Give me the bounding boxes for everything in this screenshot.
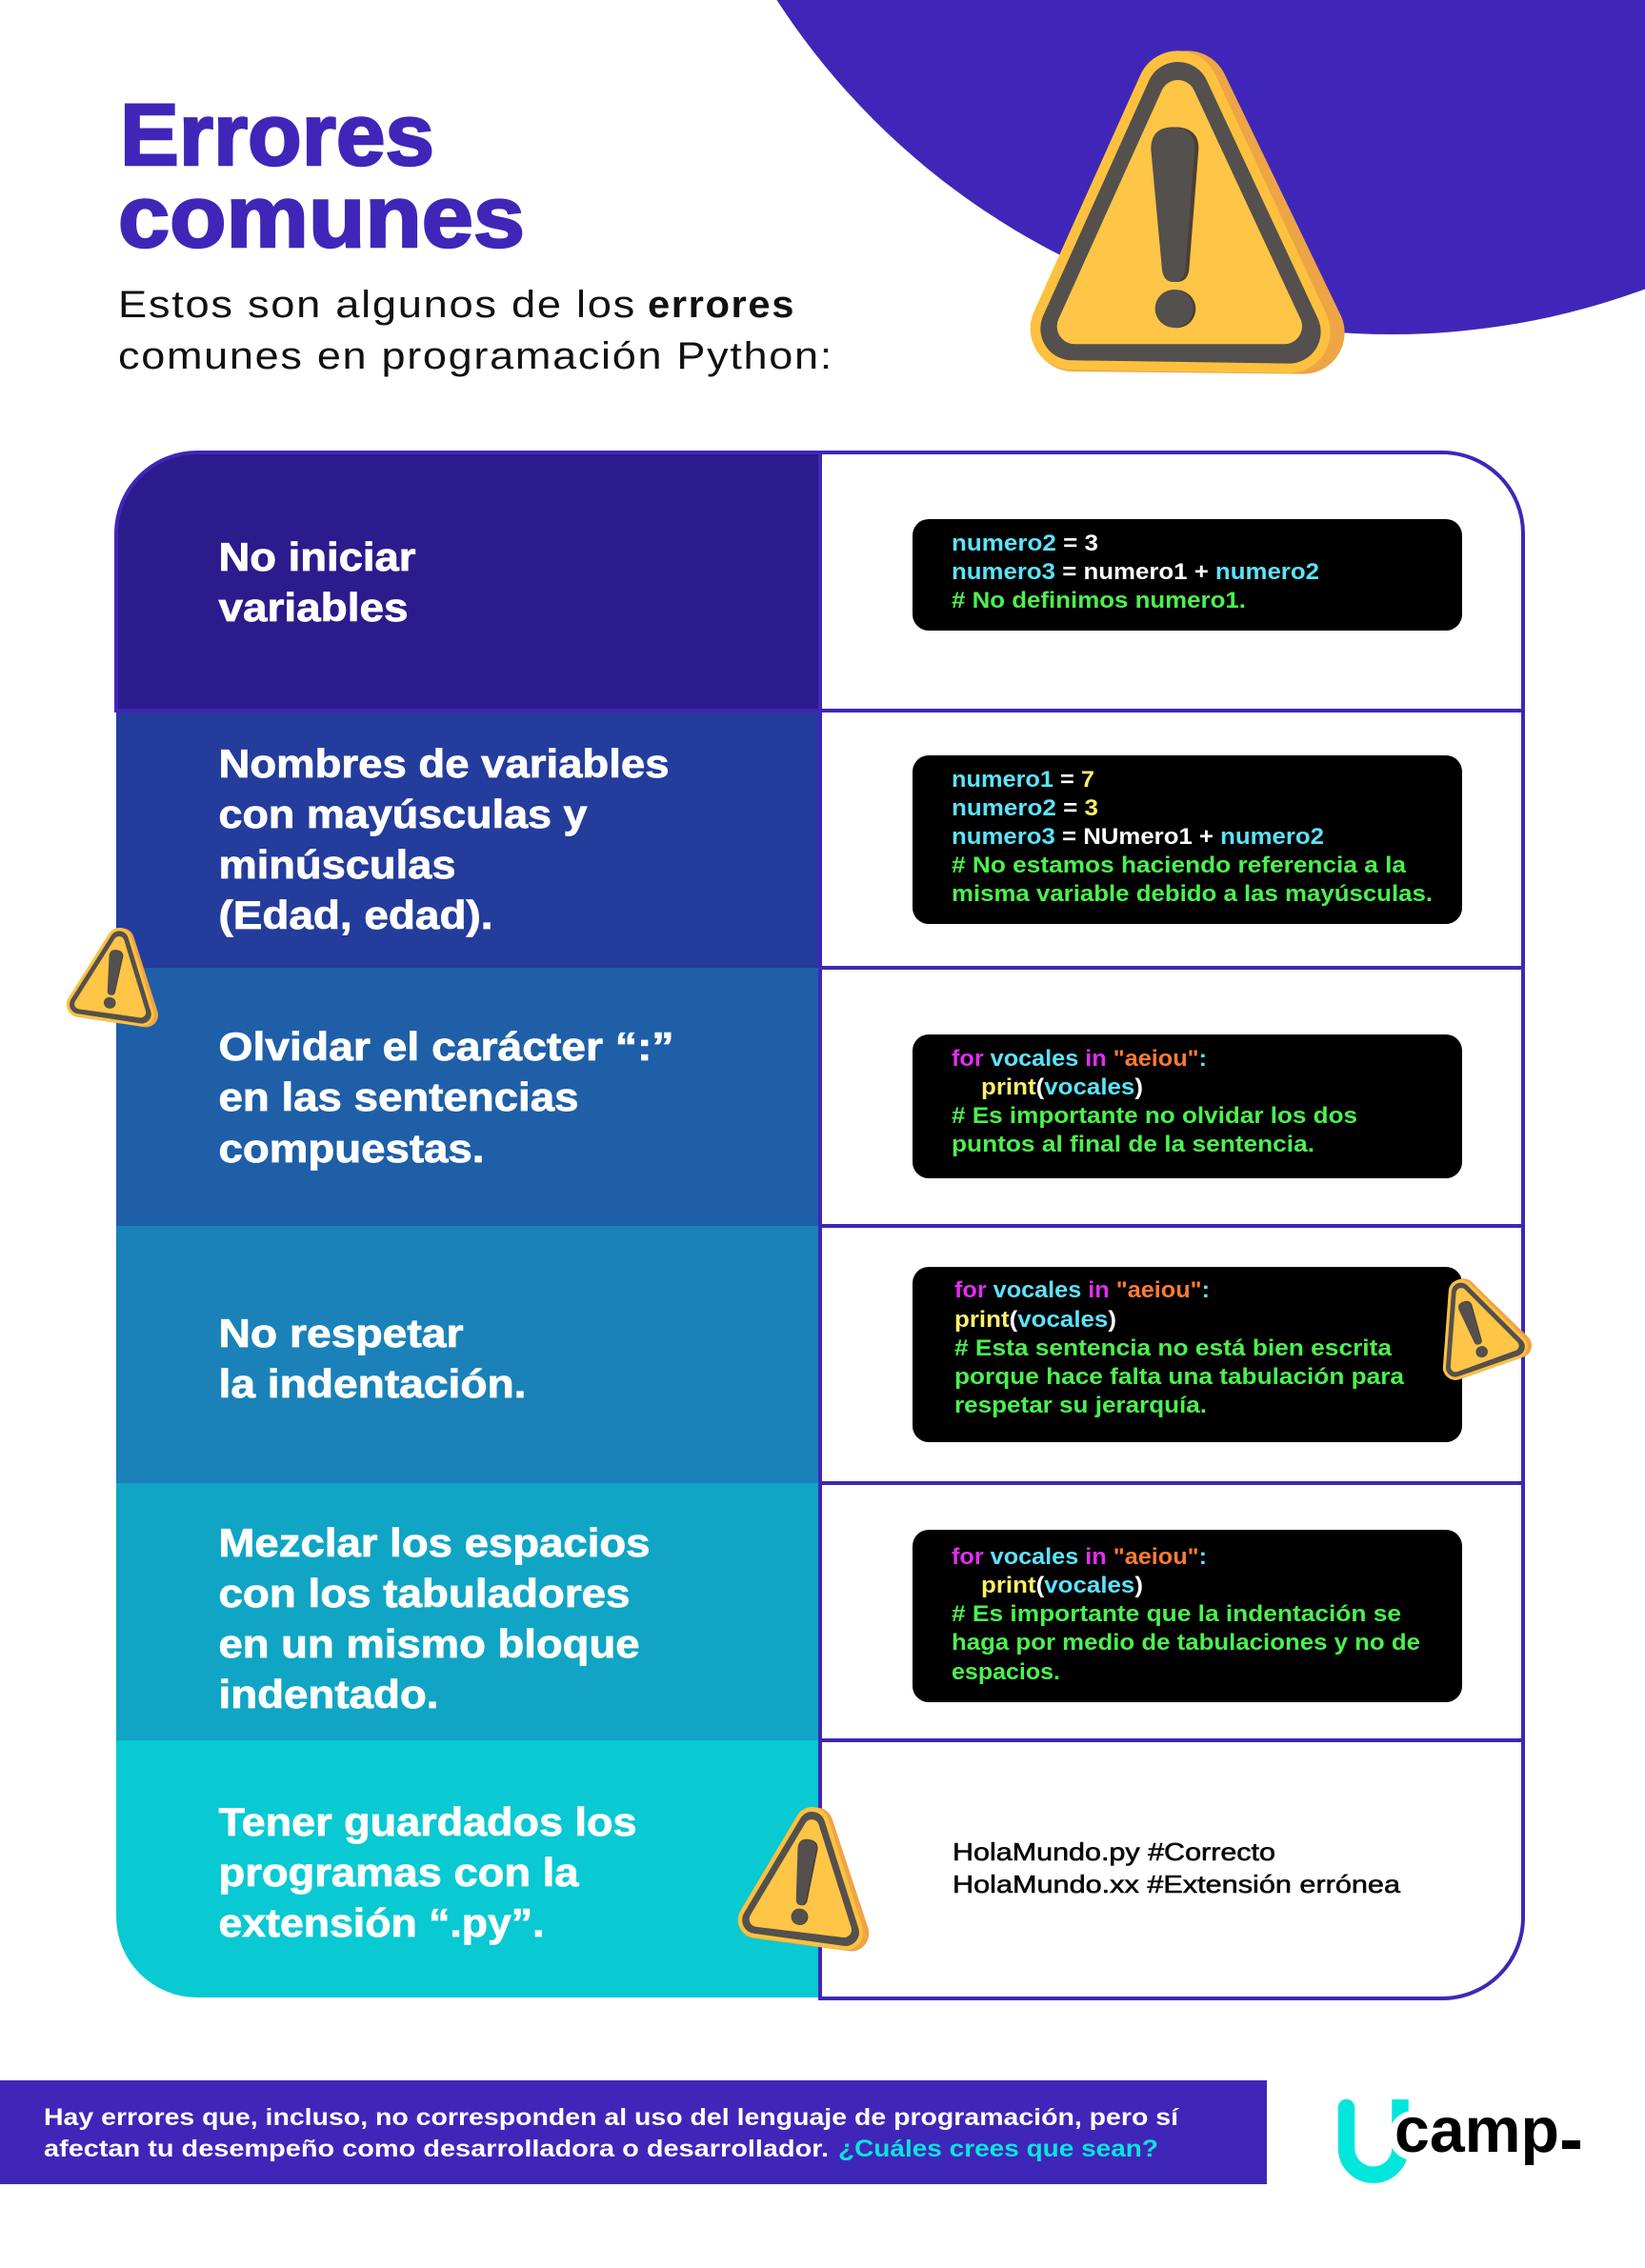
row label: mezclar espacios: Mezclar los espacios xyxy=(219,1520,650,1565)
row label: no iniciar variables: variables xyxy=(219,585,408,630)
footer text: Hay errores que, incluso, no corresponden al uso del lenguaje de programación, pero sí xyxy=(44,2104,1179,2131)
code box 3: # Es importante no olvidar los dos xyxy=(952,1103,1357,1129)
code box 3: for vocales in "aeiou": xyxy=(952,1046,1207,1072)
row label: mezclar espacios: indentado. xyxy=(219,1672,438,1716)
row label: extension py: Tener guardados los xyxy=(219,1799,636,1844)
row background: indentacion xyxy=(116,1226,819,1483)
footer text: afectan tu desempeño como desarrolladora o desarrollador. xyxy=(44,2136,829,2162)
code box 5: print(vocales ) xyxy=(981,1573,1143,1598)
code box 4 xyxy=(913,1267,1462,1442)
code box 2: # No estamos haciendo referencia a la xyxy=(952,853,1407,878)
row background: mayusculas xyxy=(116,713,819,968)
row background: extension py xyxy=(116,1740,819,1997)
subtitle: Estos son algunos de los xyxy=(118,284,636,326)
row dividers xyxy=(820,711,1523,1740)
code box 1: numero3 = numero1 + numero2 xyxy=(952,559,1319,585)
row label: olvidar el caracter: Olvidar el carácter “:” xyxy=(219,1024,674,1069)
row label: olvidar el caracter: compuestas. xyxy=(219,1126,484,1171)
code box 4: # Esta sentencia no está bien escrita xyxy=(954,1335,1393,1361)
decorative purple circle xyxy=(659,0,1645,334)
code box 2: numero3 = NUmero1 + numero2 xyxy=(952,824,1324,850)
panel: errors table xyxy=(116,452,1523,1998)
subtitle: comunes en programación Python: xyxy=(118,335,833,377)
code box 3 xyxy=(913,1034,1462,1178)
title: Errores xyxy=(120,87,434,184)
row label: nombres de variables: minúsculas xyxy=(219,842,455,887)
row label: mezclar espacios: con los tabuladores xyxy=(219,1571,631,1616)
logo mark: round cap xyxy=(1338,2099,1354,2116)
code box 2: numero2 = 3 xyxy=(952,795,1098,821)
code box 4: for vocales in "aeiou": xyxy=(954,1277,1210,1303)
row label: nombres de variables: (Edad, edad). xyxy=(219,893,493,937)
row label: mezclar espacios: en un mismo bloque xyxy=(219,1621,640,1666)
code box 5: for vocales in "aeiou": xyxy=(952,1544,1207,1570)
icon: warning triangle on code box xyxy=(1432,1279,1519,1369)
subtitle xyxy=(118,284,833,377)
file name examples: HolaMundo.xx #Extensión errónea xyxy=(953,1870,1401,1898)
code box 5: # Es importante que la indentación se xyxy=(952,1601,1401,1627)
row label: olvidar el caracter: en las sentencias xyxy=(219,1074,579,1119)
code box 4: respetar su jerarquía. xyxy=(954,1393,1207,1418)
logo halo xyxy=(1389,2111,1438,2160)
logo wordmark: camp xyxy=(1394,2095,1559,2166)
code box 1: # No definimos numero1. xyxy=(952,588,1246,613)
row background: espacios y tabuladores xyxy=(116,1483,819,1740)
icon: warning triangle bottom row xyxy=(755,1819,864,1934)
logo: Ucamp xyxy=(1338,2095,1580,2175)
row label: nombres de variables: Nombres de variables xyxy=(219,741,669,786)
title: comunes xyxy=(118,169,525,266)
row label: nombres de variables xyxy=(219,741,669,937)
file name examples: HolaMundo.py #Correcto xyxy=(953,1837,1275,1866)
row label: extension py xyxy=(219,1799,636,1945)
code box 2 xyxy=(913,755,1462,924)
subtitle: errores xyxy=(648,284,795,326)
row label: no respetar la indentacion: la indentación. xyxy=(219,1361,526,1406)
footer text: ¿Cuáles crees que sean? xyxy=(838,2136,1158,2162)
icon: large warning triangle xyxy=(1072,92,1303,332)
code box 5 xyxy=(913,1530,1462,1702)
code box 4: porque hace falta una tabulación para xyxy=(954,1364,1405,1390)
row label: extension py: extensión “.py”. xyxy=(219,1900,545,1945)
row label: nombres de variables: con mayúsculas y xyxy=(219,792,588,836)
row background: no iniciar variables xyxy=(116,452,820,711)
file name examples xyxy=(953,1837,1401,1898)
code box 2: numero1 = 7 xyxy=(952,767,1094,793)
row label: no iniciar variables xyxy=(219,534,415,630)
code box 5: espacios. xyxy=(952,1659,1060,1685)
code box 4: print(vocales ) xyxy=(954,1307,1116,1333)
row label: no iniciar variables: No iniciar xyxy=(219,534,415,579)
footer banner xyxy=(0,2080,1267,2184)
code box 1: numero2 = 3 xyxy=(952,531,1098,556)
title xyxy=(118,87,525,266)
code box 2: misma variable debido a las mayúsculas. xyxy=(952,881,1433,907)
code box 3: puntos al final de la sentencia. xyxy=(952,1132,1314,1157)
row label: no respetar la indentacion xyxy=(219,1311,526,1406)
row label: no respetar la indentacion: No respetar xyxy=(219,1311,463,1355)
row label: mezclar espacios xyxy=(219,1520,650,1716)
footer text xyxy=(44,2104,1179,2162)
logo dash xyxy=(1562,2140,1580,2149)
code box 5: haga por medio de tabulaciones y no de xyxy=(952,1630,1420,1656)
row label: olvidar el caracter xyxy=(219,1024,674,1171)
code box 1 xyxy=(913,519,1462,631)
right column outline xyxy=(820,452,1523,1998)
logo mark: U xyxy=(1347,2099,1400,2175)
row label: extension py: programas con la xyxy=(219,1850,579,1895)
code box 3: print(vocales ) xyxy=(981,1074,1143,1100)
icon: warning triangle left xyxy=(78,935,156,1015)
row background: caracter dos puntos xyxy=(116,968,819,1226)
